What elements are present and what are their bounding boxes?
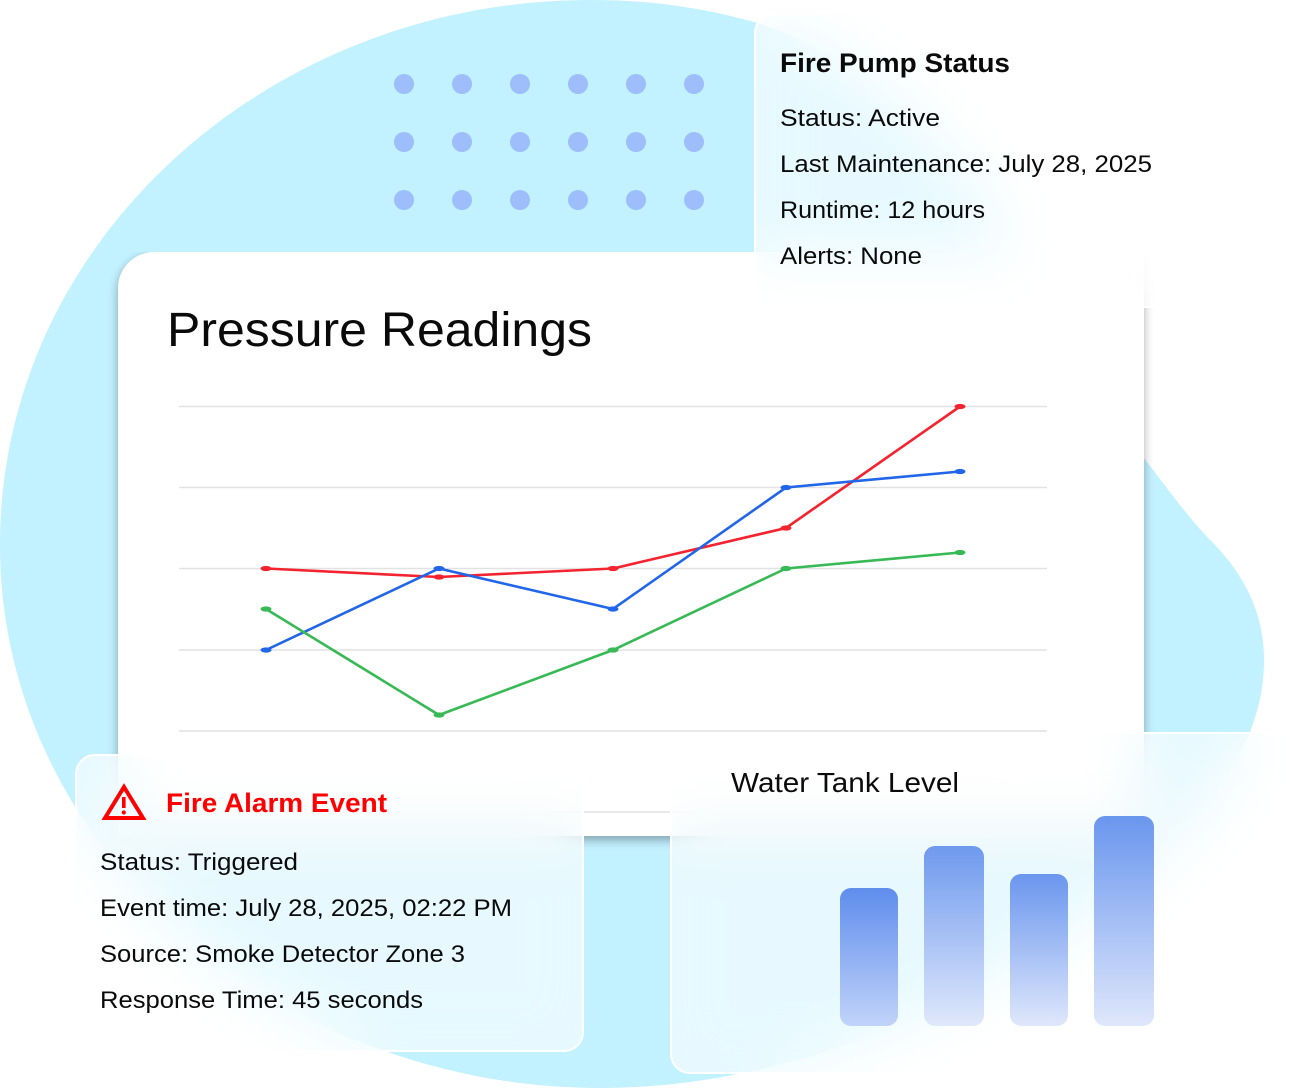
event details: Response Time: 45 seconds	[100, 987, 423, 1014]
event details	[100, 849, 512, 1014]
bar chart	[840, 816, 1154, 1026]
event details: Event time: July 28, 2025, 02:22 PM	[100, 895, 512, 922]
dot grid decoration	[394, 74, 704, 210]
status lines	[780, 105, 1152, 270]
status lines: Last Maintenance: July 28, 2025	[780, 151, 1152, 178]
heading: Fire Alarm Event: Fire Alarm Event	[166, 788, 387, 818]
line chart	[179, 404, 1047, 812]
heading: Fire Pump Status: Fire Pump Status	[780, 48, 1010, 78]
series: green	[260, 550, 966, 718]
series: blue	[260, 469, 966, 653]
status lines: Runtime: 12 hours	[780, 197, 985, 224]
event details: Status: Triggered	[100, 849, 298, 876]
status lines: Alerts: None	[780, 243, 922, 270]
event details: Source: Smoke Detector Zone 3	[100, 941, 465, 968]
panel: pressure readings	[118, 252, 1144, 836]
heading: Water Tank Level: Water Tank Level	[731, 767, 959, 798]
heading: Pressure Readings: Pressure Readings	[167, 304, 592, 357]
status lines: Status: Active	[780, 105, 940, 132]
panel: fire pump status	[754, 13, 1185, 308]
panel: fire alarm event	[75, 754, 584, 1052]
series: red	[260, 404, 966, 580]
icon: warning triangle	[105, 787, 143, 818]
panel: water tank level	[670, 732, 1290, 1074]
